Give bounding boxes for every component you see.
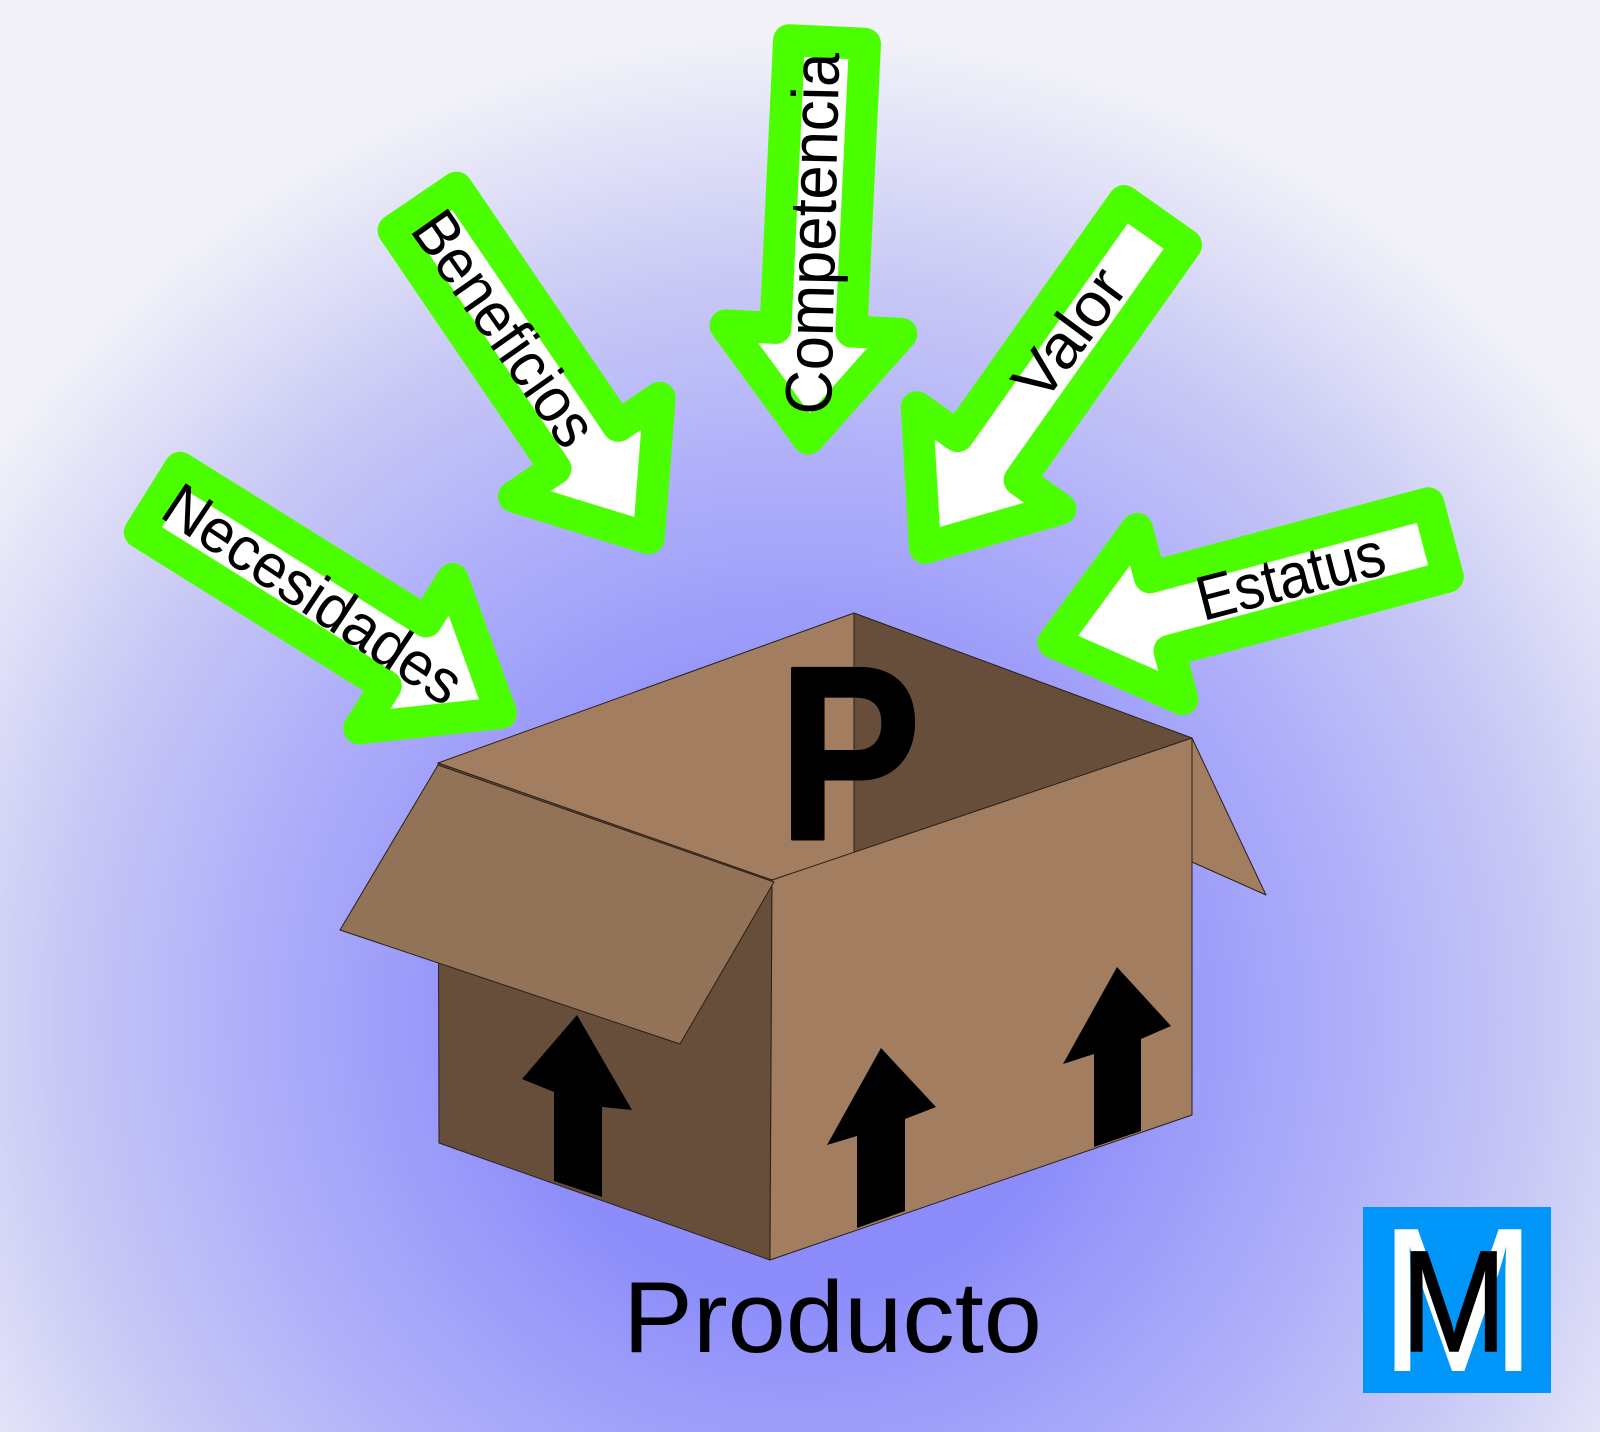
arrow: Necesidades: Necesidades xyxy=(150,470,476,719)
interior back-right panel xyxy=(854,613,1192,855)
arrow: Valor xyxy=(853,172,1227,599)
arrow: Beneficios xyxy=(352,160,721,588)
arrow: Estatus xyxy=(1031,455,1461,727)
left flap xyxy=(340,765,774,1044)
icon: up arrow on front right xyxy=(1063,967,1171,1147)
logo: M badge: M xyxy=(1401,1220,1507,1382)
icon: up arrow on left side xyxy=(522,1015,632,1197)
arrow: Necesidades xyxy=(113,425,548,788)
interior back-left panel xyxy=(438,613,854,880)
box right side xyxy=(770,738,1192,1260)
arrow: Competencia: Competencia xyxy=(771,51,853,415)
arrow: Estatus: Estatus xyxy=(1189,519,1392,635)
box left side xyxy=(438,763,772,1260)
letter P: P xyxy=(778,615,921,892)
arrow: Competencia xyxy=(720,38,915,443)
arrow: Beneficios: Beneficios xyxy=(398,197,612,460)
open cardboard box xyxy=(340,613,1266,1260)
label: Producto: Producto xyxy=(623,1262,1042,1374)
logo: M badge: M xyxy=(1379,1185,1537,1415)
arrow: Valor: Valor xyxy=(999,255,1141,413)
right flap xyxy=(1192,738,1266,895)
icon: up arrow on front middle xyxy=(827,1048,936,1228)
